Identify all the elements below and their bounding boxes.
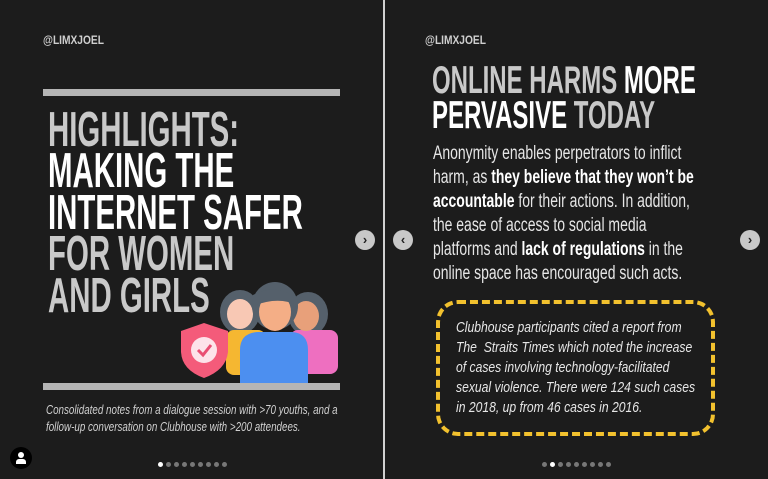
arrow: next — [740, 230, 760, 250]
body text: harm, as they believe that they won’t be — [433, 167, 694, 188]
callout: dashed box: of cases involving technology-facilitated — [456, 359, 669, 376]
panel: left slide — [10, 33, 375, 469]
caption — [46, 402, 338, 434]
arrow: previous: ‹ — [401, 232, 405, 247]
title — [432, 59, 696, 137]
callout: dashed box: The Straits Times which noted the increase — [456, 339, 692, 356]
handle: @LIMXJOEL — [43, 33, 104, 47]
body text: online space has encouraged such acts. — [433, 263, 682, 284]
body text: the ease of access to social media — [433, 215, 646, 236]
callout: dashed box: sexual violence. There were 124 such cases — [456, 379, 695, 396]
arrow: next: › — [363, 232, 367, 247]
arrow: next — [355, 230, 375, 250]
title — [48, 103, 303, 323]
arrow: previous — [393, 230, 413, 250]
callout: dashed box: in 2018, up from 46 cases in 2016. — [456, 399, 642, 416]
divider between slides — [383, 0, 385, 479]
title: PERVASIVE TODAY — [432, 94, 655, 137]
panel: right slide — [393, 33, 760, 467]
top bar — [43, 89, 340, 96]
body text — [433, 143, 694, 284]
title: ONLINE HARMS MORE — [432, 59, 696, 102]
bottom bar — [43, 383, 340, 390]
caption: follow-up conversation on Clubhouse with >200 attendees. — [46, 419, 301, 434]
illustration: three women and shield — [181, 282, 338, 383]
title: HIGHLIGHTS: — [48, 103, 239, 157]
arrow: next: › — [748, 232, 752, 247]
title: FOR WOMEN — [48, 227, 234, 281]
title: MAKING THE — [48, 144, 234, 198]
callout: dashed box: Clubhouse participants cited a report from — [456, 319, 682, 336]
body text: accountable for their actions. In addition, — [433, 191, 690, 212]
body text: Anonymity enables perpetrators to inflict — [433, 143, 681, 164]
pagination dots — [158, 462, 227, 467]
pagination dots — [542, 462, 611, 467]
callout: dashed box — [436, 300, 715, 436]
title: INTERNET SAFER — [48, 186, 303, 240]
title: AND GIRLS — [48, 269, 210, 323]
icon: profile — [10, 447, 32, 469]
body text: platforms and lack of regulations in the — [433, 239, 683, 260]
handle: @LIMXJOEL — [425, 33, 486, 47]
caption: Consolidated notes from a dialogue session with >70 youths, and a — [46, 402, 338, 417]
